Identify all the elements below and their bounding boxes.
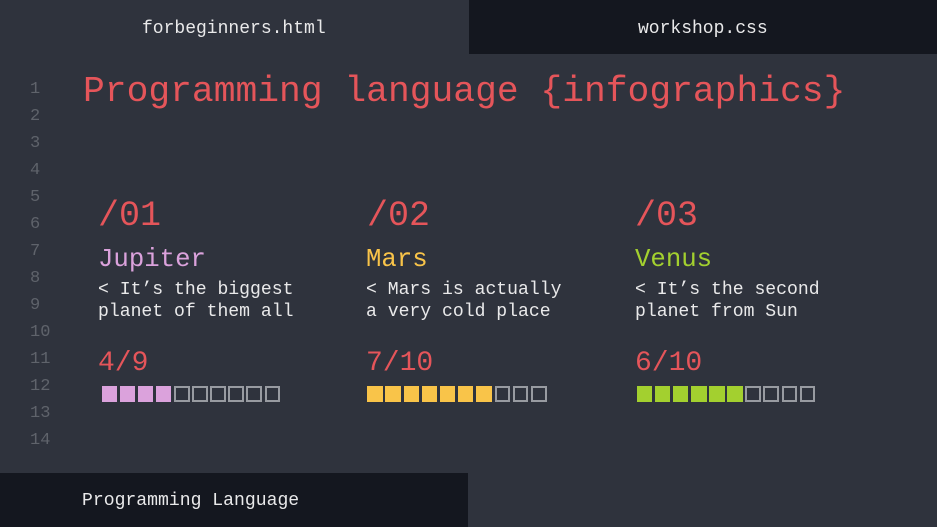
heading: Mars: Mars xyxy=(366,245,428,274)
score: 6/10: 6/10 xyxy=(635,348,702,379)
title: Programming language {infographics} xyxy=(83,71,845,112)
number 01: /01 xyxy=(98,196,161,236)
score: 7/10: 7/10 xyxy=(366,348,433,379)
progress bar: Venus xyxy=(637,386,815,402)
line numbers: 10 xyxy=(30,323,50,342)
line numbers: 6 xyxy=(30,215,40,234)
line numbers: 8 xyxy=(30,269,40,288)
footer label: Programming Language xyxy=(82,491,299,511)
line numbers: 1 xyxy=(30,80,40,99)
number 03: /03 xyxy=(635,196,698,236)
line numbers: 3 xyxy=(30,134,40,153)
progress bar: Jupiter xyxy=(102,386,280,402)
tab label: forbeginners.html: forbeginners.html xyxy=(142,19,326,39)
number 02: /02 xyxy=(367,196,430,236)
panel: Jupiter xyxy=(98,196,293,402)
line numbers: 11 xyxy=(30,350,50,369)
score: 4/9: 4/9 xyxy=(98,348,148,379)
description: Venus: < It’s the second planet from Sun xyxy=(635,280,820,322)
heading: Jupiter: Jupiter xyxy=(98,245,206,274)
panel: Mars xyxy=(366,196,561,402)
line numbers: 12 xyxy=(30,377,50,396)
line numbers: 7 xyxy=(30,242,40,261)
tab: workshop.css background xyxy=(469,0,937,54)
line numbers: 4 xyxy=(30,161,40,180)
heading: Venus: Venus xyxy=(635,245,712,274)
line numbers xyxy=(30,80,50,450)
footer bar xyxy=(0,473,468,527)
line numbers: 2 xyxy=(30,107,40,126)
line numbers: 14 xyxy=(30,431,50,450)
description: Mars: < Mars is actually a very cold place xyxy=(366,280,561,322)
line numbers: 5 xyxy=(30,188,40,207)
line numbers: 9 xyxy=(30,296,40,315)
line numbers: 13 xyxy=(30,404,50,423)
description: Jupiter: < It’s the biggest planet of them all xyxy=(98,280,293,322)
progress bar: Mars xyxy=(367,386,547,402)
tab label: workshop.css: workshop.css xyxy=(638,19,768,39)
